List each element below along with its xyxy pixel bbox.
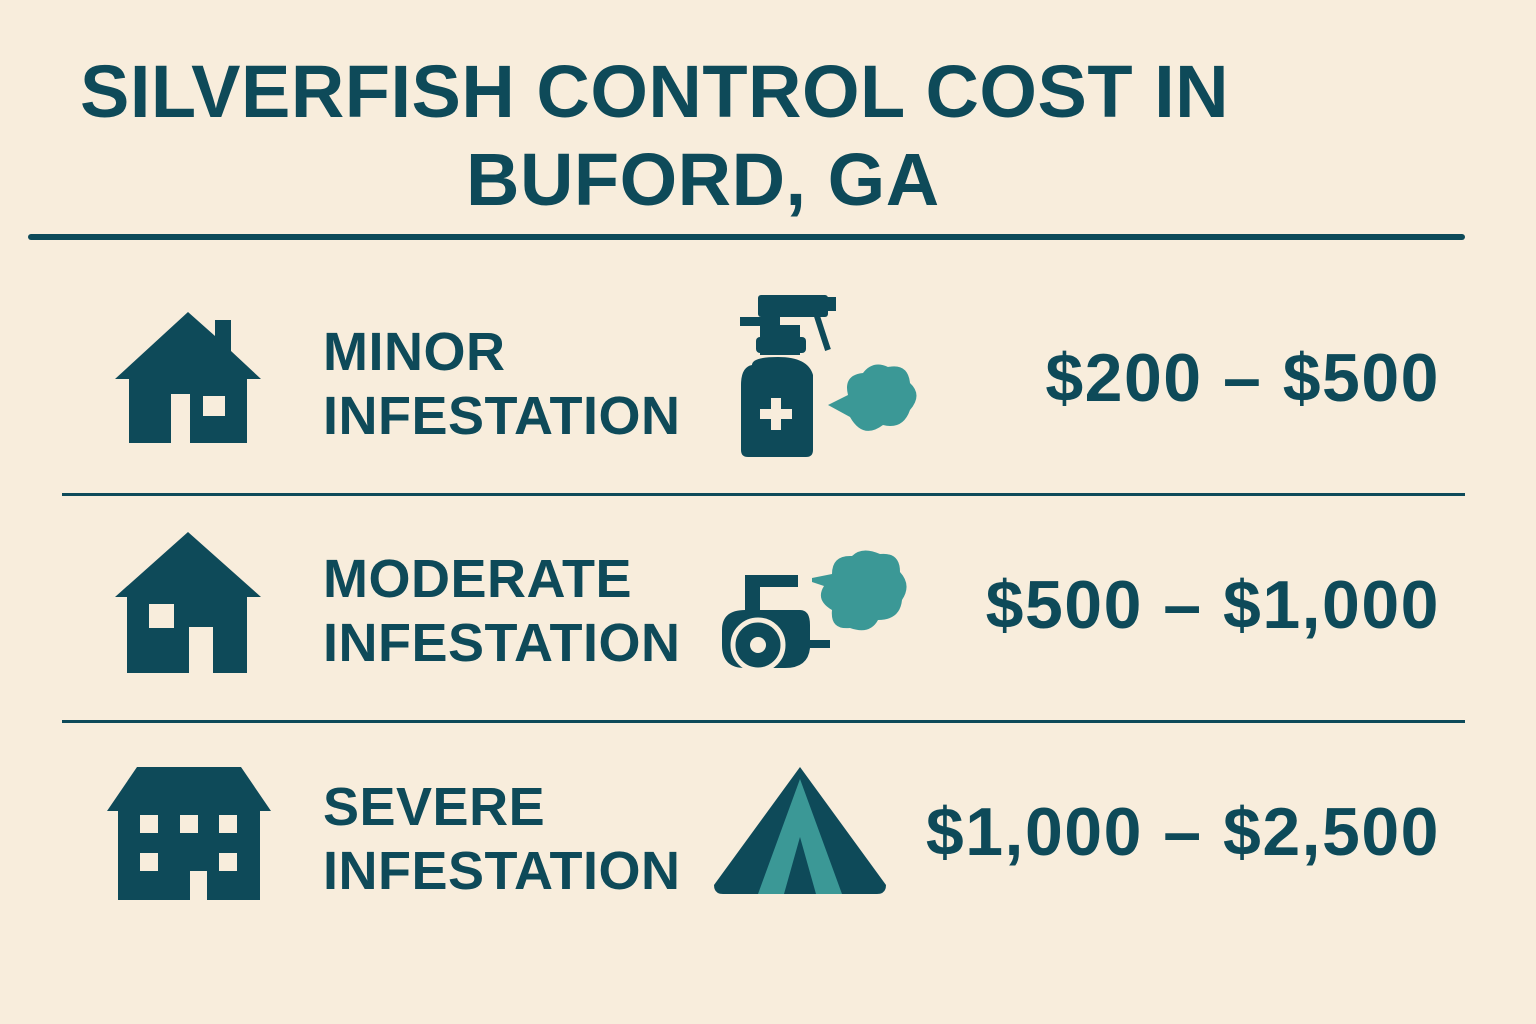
label xyxy=(323,549,680,673)
price: $500 – $1,000 xyxy=(986,567,1440,643)
price: $200 – $500 xyxy=(1045,340,1440,416)
row: minor xyxy=(115,295,1440,457)
icon: large house xyxy=(107,767,271,900)
icon: house xyxy=(115,532,261,673)
label: SEVERE xyxy=(323,777,545,837)
label: INFESTATION xyxy=(323,386,680,446)
label: INFESTATION xyxy=(323,841,680,901)
row: moderate xyxy=(115,532,1440,673)
text: SILVERFISH CONTROL COST IN xyxy=(80,50,1229,133)
label: MODERATE xyxy=(323,549,632,609)
row: severe xyxy=(107,767,1440,901)
label: INFESTATION xyxy=(323,613,680,673)
title xyxy=(80,50,1229,221)
icon: fumigation tent xyxy=(714,767,886,894)
label: MINOR xyxy=(323,322,505,382)
icon: small house xyxy=(115,312,261,443)
label xyxy=(323,777,680,901)
icon: fogger machine xyxy=(722,550,907,668)
label xyxy=(323,322,680,446)
icon: spray bottle xyxy=(740,295,916,457)
price: $1,000 – $2,500 xyxy=(926,794,1440,870)
text: BUFORD, GA xyxy=(466,138,940,221)
